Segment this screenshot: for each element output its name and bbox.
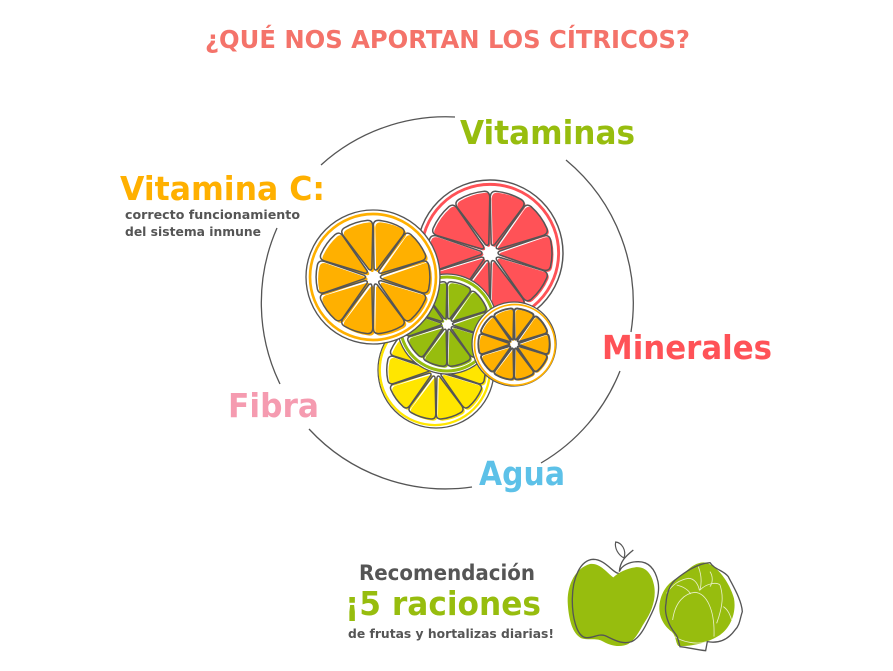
ring of arcs around the fruit: [261, 117, 633, 489]
icon: lime slice: [397, 274, 497, 374]
text: Vitamina C description: correcto funcionamiento: [125, 207, 300, 222]
icon: artichoke: [659, 562, 742, 651]
label: Minerales: Minerales: [602, 328, 772, 367]
text: 5 raciones: ¡5 raciones: [345, 584, 541, 623]
title: ¿QUÉ NOS APORTAN LOS CÍTRICOS?: [205, 25, 690, 54]
icon: small orange slice: [472, 302, 556, 386]
text: Vitamina C description: [125, 207, 300, 239]
icon: citrus slices: [306, 180, 563, 428]
label: Fibra: Fibra: [228, 386, 319, 425]
label: Vitaminas: Vitaminas: [460, 113, 635, 152]
icon: orange slice: [306, 210, 440, 344]
label: Vitamina C: Vitamina C:: [120, 169, 325, 208]
text: Vitamina C description: del sistema inmune: [125, 224, 261, 239]
text: Recomendación: Recomendación: [359, 561, 535, 585]
icon: lemon slice: [378, 312, 494, 428]
icon: grapefruit slice: [417, 180, 563, 326]
icon: apple: [568, 542, 659, 646]
label: Agua: Agua: [479, 454, 565, 493]
text: de frutas y hortalizas diarias: de frutas y hortalizas diarias!: [348, 626, 554, 641]
